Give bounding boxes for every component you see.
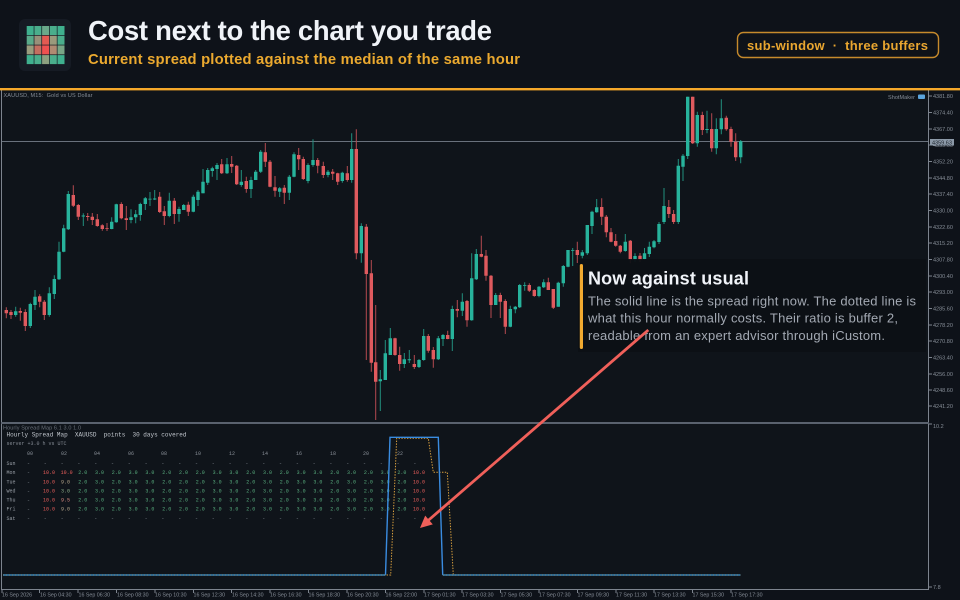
price axis: 4293.00 bbox=[933, 290, 953, 296]
price axis: 4270.80 bbox=[933, 339, 953, 345]
hour header: 18 bbox=[330, 451, 336, 457]
row: Tue: 2.0 3.0 2.0 3.0 3.0 2.0 2.0 2.0 3.0 3.0 2.0 3.0 2.0 3.0 3.0 2.0 3.0 2.0 3.0 2.0 bbox=[78, 479, 406, 485]
sub-window axis: 10.2 bbox=[933, 424, 944, 430]
row: Tue: - bbox=[27, 479, 30, 485]
price axis bbox=[929, 94, 953, 410]
hour header: 10 bbox=[195, 451, 201, 457]
time axis: 16 Sep 10:30 bbox=[155, 592, 187, 598]
accent line bbox=[0, 88, 960, 90]
green wicks bbox=[16, 97, 741, 411]
row: Mon: 10.0 bbox=[413, 470, 425, 476]
time axis: 16 Sep 20:30 bbox=[347, 592, 379, 598]
price axis: 4285.60 bbox=[933, 307, 953, 313]
hour header: 14 bbox=[262, 451, 268, 457]
hour header: 16 bbox=[296, 451, 302, 457]
current price tag: 4359.63 bbox=[932, 140, 952, 146]
row: Mon: - bbox=[27, 470, 30, 476]
sub-window title: Hourly Spread Map 6.1 3.0 1.0 bbox=[3, 426, 81, 432]
row: Wed: - bbox=[27, 488, 30, 494]
time axis: 17 Sep 13:30 bbox=[654, 592, 686, 598]
hour header bbox=[27, 451, 403, 457]
time axis: 17 Sep 03:30 bbox=[462, 592, 494, 598]
row: Sun: Sun bbox=[6, 461, 16, 467]
callout body: The solid line is the spread right now. The dotted line is bbox=[588, 294, 916, 309]
sub-window axis bbox=[929, 424, 944, 591]
row: Fri: 9.0 bbox=[61, 507, 70, 513]
callout heading: Now against usual bbox=[588, 268, 749, 288]
server offset note: server +3.0 h vs UTC bbox=[6, 441, 66, 447]
time axis: 17 Sep 09:30 bbox=[578, 592, 609, 598]
price axis: 4278.20 bbox=[933, 323, 953, 329]
time axis: 17 Sep 17:30 bbox=[731, 592, 763, 598]
price axis: 4374.40 bbox=[933, 111, 953, 117]
time axis bbox=[2, 590, 763, 598]
price axis: 4248.60 bbox=[933, 388, 953, 394]
spread map heading: Hourly Spread Map XAUUSD points 30 days covered bbox=[6, 432, 187, 438]
red wicks bbox=[6, 97, 736, 420]
row: Sat: - - - - - - - - - - - - - - - - - - - - - - - - bbox=[27, 516, 416, 522]
hour header: 00 bbox=[27, 451, 33, 457]
badge: sub-window, three buffers: sub-window · three buffers bbox=[747, 38, 928, 53]
time axis: 16 Sep 2026 bbox=[2, 592, 32, 598]
row: Mon: 10.0 bbox=[61, 470, 73, 476]
row: Wed: Wed bbox=[6, 488, 16, 494]
time axis: 17 Sep 01:30 bbox=[424, 592, 456, 598]
line chart: current spread, solid bbox=[3, 437, 740, 575]
row: Tue: Tue bbox=[6, 479, 16, 485]
price axis: 4307.80 bbox=[933, 258, 953, 264]
price axis: 4367.00 bbox=[933, 127, 953, 133]
row: Thu: 10.0 bbox=[413, 498, 425, 504]
hour header: 12 bbox=[229, 451, 235, 457]
callout body bbox=[587, 294, 916, 343]
hour header: 22 bbox=[397, 451, 403, 457]
row: Wed: 10.0 bbox=[413, 488, 425, 494]
chart label: symbol: XAUUSD, M15: Gold vs US Dollar bbox=[4, 93, 93, 99]
row: Fri: - bbox=[27, 507, 30, 513]
watermark: ShotMaker: ShotMaker bbox=[888, 95, 915, 101]
price axis: 4344.80 bbox=[933, 176, 953, 182]
row: Tue: 10.0 bbox=[43, 479, 55, 485]
icon: heat map logo bbox=[19, 19, 71, 71]
row: Thu: 9.5 bbox=[61, 498, 70, 504]
candlestick chart bbox=[6, 97, 741, 420]
time axis: 16 Sep 14:30 bbox=[232, 592, 264, 598]
time axis: 16 Sep 04:30 bbox=[40, 592, 72, 598]
green bodies bbox=[16, 97, 741, 381]
price axis: 4300.40 bbox=[933, 274, 953, 280]
row: Wed: 2.0 3.0 2.0 3.0 3.0 2.0 2.0 2.0 3.0 3.0 2.0 3.0 2.0 3.0 3.0 2.0 3.0 2.0 3.0 2.0 bbox=[78, 488, 406, 494]
hour header: 06 bbox=[128, 451, 134, 457]
time axis: 17 Sep 15:30 bbox=[692, 592, 724, 598]
row: Thu: Thu bbox=[6, 498, 16, 504]
callout body: readable from an expert advisor through iCustom. bbox=[588, 328, 885, 343]
time axis: 17 Sep 11:30 bbox=[616, 592, 647, 598]
subtitle: Current spread plotted against the median of the same hour bbox=[88, 52, 520, 68]
row: Fri: Fri bbox=[6, 507, 16, 513]
callout: now against usual bbox=[578, 259, 926, 352]
line chart: median spread, dotted bbox=[3, 438, 740, 575]
price axis: 4359.60 bbox=[933, 143, 953, 149]
price axis: 4256.00 bbox=[933, 372, 953, 378]
arrow: callout to sub-window bbox=[420, 330, 648, 528]
row: Thu: - bbox=[27, 498, 30, 504]
hour header: 02 bbox=[61, 451, 67, 457]
price axis: 4352.20 bbox=[933, 159, 953, 165]
row: Mon: Mon bbox=[6, 470, 16, 476]
time axis: 16 Sep 06:30 bbox=[78, 592, 110, 598]
row: Fri: 2.0 3.0 2.0 3.0 3.0 2.0 2.0 2.0 3.0 3.0 2.0 3.0 2.0 3.0 3.0 2.0 3.0 2.0 3.0 2.0 bbox=[78, 507, 406, 513]
red bodies bbox=[6, 97, 736, 382]
watermark: ShotMaker bbox=[888, 94, 925, 101]
price axis: 4241.20 bbox=[933, 404, 953, 410]
price axis: 4337.40 bbox=[933, 192, 953, 198]
callout accent bar bbox=[580, 264, 583, 349]
spread table bbox=[6, 451, 425, 522]
row: Sun: - - - - - - - - - - - - - - - - - - - - - - - - bbox=[27, 461, 416, 467]
price axis: 4381.80 bbox=[933, 94, 953, 100]
hour header: 08 bbox=[161, 451, 167, 457]
sub-window axis: 7.8 bbox=[933, 585, 941, 591]
row: Fri: 10.0 bbox=[43, 507, 55, 513]
time axis: 16 Sep 18:30 bbox=[308, 592, 340, 598]
price axis: 4263.40 bbox=[933, 356, 953, 362]
row: Tue: 10.0 bbox=[413, 479, 425, 485]
current price tag bbox=[930, 139, 954, 146]
time axis: 16 Sep 08:30 bbox=[117, 592, 149, 598]
hour header: 20 bbox=[363, 451, 369, 457]
row: Fri: 10.0 bbox=[413, 507, 425, 513]
row: Sat: Sat bbox=[6, 516, 16, 522]
row: Thu: 10.0 bbox=[43, 498, 55, 504]
hour header: 04 bbox=[94, 451, 100, 457]
time axis: 17 Sep 05:30 bbox=[500, 592, 532, 598]
row: Mon: 2.0 3.0 2.0 3.0 3.0 2.0 2.0 2.0 3.0 3.0 2.0 3.0 2.0 3.0 3.0 2.0 3.0 2.0 3.0 2.0 bbox=[78, 470, 406, 476]
callout body: what this hour normally costs. Their ratio is buffer 2, bbox=[587, 311, 898, 326]
time axis: 17 Sep 07:30 bbox=[539, 592, 571, 598]
price axis: 4330.00 bbox=[933, 209, 953, 215]
title: Cost next to the chart you trade bbox=[88, 15, 492, 46]
price axis: 4322.60 bbox=[933, 225, 953, 231]
time axis: 16 Sep 12:30 bbox=[194, 592, 225, 598]
time axis: 16 Sep 16:30 bbox=[270, 592, 302, 598]
row: Mon: 10.0 bbox=[43, 470, 55, 476]
row: Thu: 2.0 3.0 2.0 3.0 3.0 2.0 2.0 2.0 3.0 3.0 2.0 3.0 2.0 3.0 3.0 2.0 3.0 2.0 3.0 2.0 bbox=[78, 498, 406, 504]
row: Tue: 9.0 bbox=[61, 479, 70, 485]
price axis: 4315.20 bbox=[933, 241, 953, 247]
row: Wed: 3.0 bbox=[61, 488, 70, 494]
badge: sub-window, three buffers bbox=[738, 32, 938, 58]
row: Wed: 10.0 bbox=[43, 488, 55, 494]
time axis: 16 Sep 22:00 bbox=[386, 592, 417, 598]
